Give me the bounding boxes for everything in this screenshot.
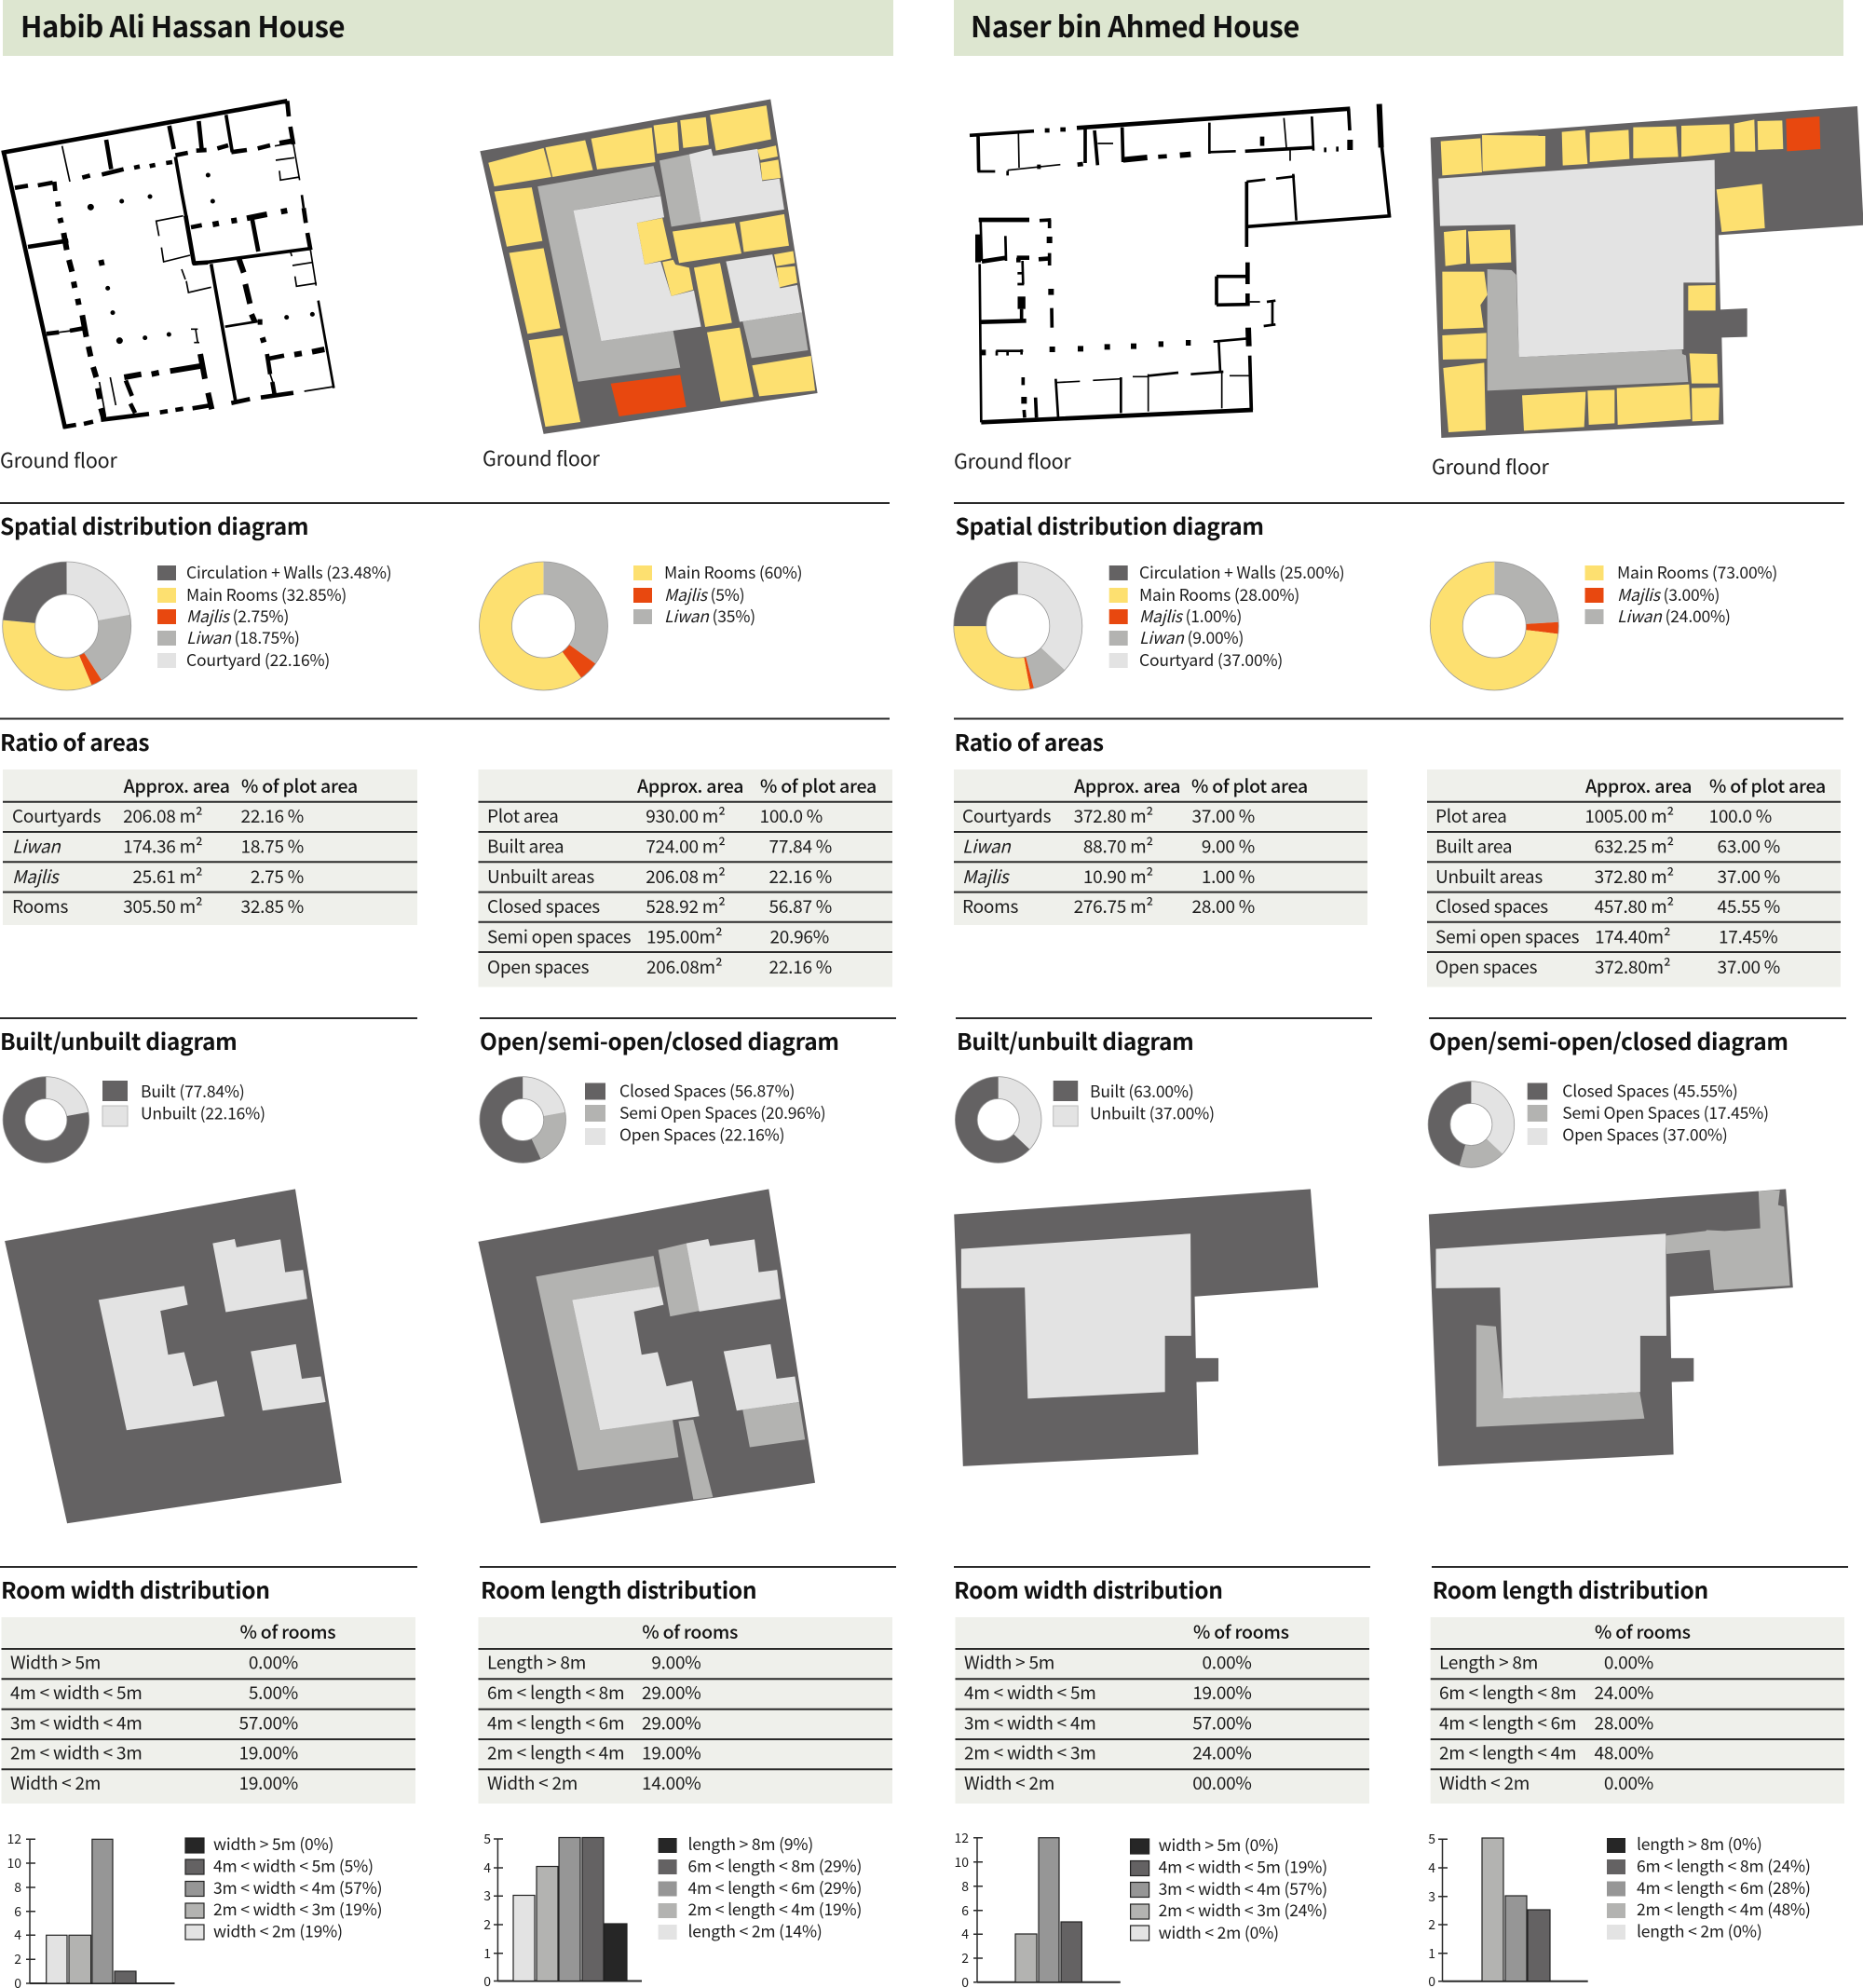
donut: spatial distribution whole plot [3, 562, 131, 690]
heading: built/unbuilt: Built/unbuilt diagram [0, 1025, 237, 1057]
table: room width [2, 1617, 415, 1804]
table: plot areas: 45.55 % [1718, 893, 1780, 919]
bar chart: room length: 1 [1428, 1944, 1435, 1963]
legend: room length: 4m < length < 6m (28%) [1637, 1876, 1811, 1899]
plan: open/semi-open/closed map [478, 1189, 815, 1523]
legend: open/semi-open/closed: Semi Open Spaces (17.45%) [1562, 1101, 1769, 1124]
legend: built/unbuilt: Unbuilt (22.16%) [141, 1101, 265, 1125]
legend: spatial distribution whole plot: Liwan (9.00%) [1139, 626, 1244, 649]
table: courtyard and room areas: Approx. area [124, 771, 230, 798]
table: courtyard and room areas: 10.90 m² [1083, 864, 1153, 889]
table: room length: % of rooms [1595, 1617, 1691, 1644]
table: room length: 9.00% [651, 1650, 700, 1675]
table: room width: 2m < width < 3m [964, 1740, 1096, 1765]
legend: spatial distribution whole plot: Liwan (18.75%) [186, 626, 300, 649]
bar chart: room length: 2 [483, 1915, 491, 1934]
table: plot areas: 22.16 % [769, 864, 832, 889]
donut: spatial distribution built rooms [479, 562, 607, 690]
table: courtyard and room areas: 305.50 m² [123, 893, 203, 919]
legend: room width [1131, 1833, 1327, 1944]
table: plot areas: Unbuilt areas [1435, 864, 1543, 889]
table: room width: 19.00% [239, 1770, 298, 1795]
label: ground floor (walls): Ground floor [0, 445, 118, 474]
legend: open/semi-open/closed: Closed Spaces (45.55%) [1562, 1079, 1738, 1103]
table: room width [956, 1617, 1369, 1804]
heading: ratio of areas: Ratio of areas [954, 726, 1104, 758]
legend: room length: 6m < length < 8m (29%) [687, 1854, 862, 1878]
table: courtyard and room areas: 372.80 m² [1074, 803, 1153, 828]
bar chart: room width: 6 [961, 1901, 969, 1920]
label: ground floor (rooms): Ground floor [1432, 452, 1550, 481]
legend: spatial distribution whole plot: Circulation + Walls (25.00%) [1139, 561, 1345, 584]
legend: room length [659, 1832, 862, 1943]
table: room length: 2m < length < 4m [487, 1740, 624, 1765]
table: room length: % of rooms [642, 1617, 738, 1644]
bar chart: room width: 4 [961, 1925, 969, 1943]
table: room length: Width < 2m [1439, 1770, 1530, 1795]
table: room width: 2m < width < 3m [10, 1740, 143, 1765]
table: room length: 6m < length < 8m [1439, 1680, 1576, 1705]
table: courtyard and room areas: 28.00 % [1192, 893, 1255, 919]
table: room width: Width < 2m [10, 1770, 101, 1795]
table: courtyard and room areas: Majlis [962, 864, 1011, 889]
bar chart: room width: 6 [14, 1902, 21, 1921]
table: room width: 5.00% [249, 1680, 298, 1705]
legend: room length: 6m < length < 8m (24%) [1637, 1854, 1811, 1878]
table: plot areas: 63.00 % [1718, 833, 1780, 858]
table: plot areas: Built area [487, 833, 564, 858]
bar chart: room width: 2 [14, 1950, 21, 1968]
bar chart: room length [1428, 1830, 1588, 1988]
legend: open/semi-open/closed: Open Spaces (22.16%) [619, 1123, 784, 1146]
table: plot areas: 1005.00 m² [1584, 803, 1674, 828]
table: room length: 19.00% [642, 1740, 700, 1765]
legend: room length: 2m < length < 4m (19%) [687, 1898, 862, 1921]
table: room width: 57.00% [239, 1709, 298, 1735]
table: courtyard and room areas: 9.00 % [1202, 833, 1255, 858]
donut: open/semi-open/closed [480, 1077, 566, 1163]
heading: room width: Room width distribution [1, 1573, 270, 1606]
table: room length: 29.00% [642, 1709, 700, 1735]
legend: spatial distribution built rooms: Majlis (5%) [664, 583, 744, 606]
table: room length: Length > 8m [1439, 1650, 1538, 1675]
table: courtyard and room areas: 25.61 m² [132, 864, 203, 889]
plan: coloured room map [480, 100, 818, 434]
table: room length: 29.00% [642, 1680, 700, 1705]
bar chart: room length [483, 1830, 642, 1988]
table: plot areas [479, 769, 892, 987]
legend: room length: length > 8m (9%) [687, 1832, 813, 1856]
legend: open/semi-open/closed [1528, 1079, 1769, 1146]
legend: spatial distribution whole plot: Main Rooms (32.85%) [186, 583, 347, 606]
bar chart: room width [7, 1830, 175, 1988]
table: room width: % of rooms [1193, 1617, 1289, 1644]
bar chart: room length: 5 [1428, 1830, 1435, 1848]
table: plot areas: Semi open spaces [487, 924, 632, 949]
table: courtyard and room areas: 1.00 % [1202, 864, 1255, 889]
legend: open/semi-open/closed: Semi Open Spaces (20.96%) [619, 1101, 826, 1124]
label: ground floor (walls): Ground floor [954, 446, 1072, 475]
table: room width: 3m < width < 4m [10, 1709, 143, 1735]
table: room width: 57.00% [1192, 1709, 1252, 1735]
plan: black wall drawing [2, 101, 333, 429]
table: room width: % of rooms [240, 1617, 335, 1644]
plan: built/unbuilt map [5, 1189, 342, 1523]
table: plot areas: Closed spaces [487, 893, 600, 919]
table: courtyard and room areas: 18.75 % [241, 833, 304, 858]
legend: room length: length > 8m (0%) [1637, 1832, 1762, 1856]
table: courtyard and room areas: 32.85 % [241, 893, 304, 919]
bar chart: room width: 2 [961, 1949, 969, 1968]
legend: spatial distribution built rooms: Main Rooms (73.00%) [1617, 561, 1777, 584]
legend: spatial distribution built rooms: Liwan (35%) [664, 605, 755, 628]
bar chart: room width: 12 [954, 1829, 969, 1847]
table: plot areas: % of plot area [760, 771, 877, 798]
legend: spatial distribution whole plot: Majlis (1.00%) [1139, 605, 1242, 628]
legend: built/unbuilt: Unbuilt (37.00%) [1090, 1101, 1215, 1125]
table: plot areas: Approx. area [1585, 771, 1692, 798]
table: room width: 19.00% [239, 1740, 298, 1765]
bar chart: room width [954, 1829, 1121, 1988]
table: plot areas: Closed spaces [1435, 893, 1548, 919]
legend: spatial distribution whole plot: Courtyard (37.00%) [1139, 648, 1283, 672]
table: room length: 14.00% [642, 1770, 700, 1795]
table: plot areas: 528.92 m² [646, 893, 726, 919]
legend: room length: 2m < length < 4m (48%) [1637, 1898, 1811, 1921]
table: plot areas: 20.96% [769, 924, 829, 949]
title banner: Habib Ali Hassan House [20, 4, 345, 46]
bar chart: room width: 10 [954, 1853, 969, 1872]
table: plot areas: 77.84 % [769, 833, 832, 858]
plan: open/semi-open/closed map [1429, 1189, 1793, 1466]
title banner: Naser bin Ahmed House [971, 4, 1299, 46]
table: courtyard and room areas: Rooms [12, 893, 68, 919]
table: plot areas: 37.00 % [1718, 864, 1780, 889]
title banner [954, 0, 1843, 56]
table: plot areas: 930.00 m² [646, 803, 726, 828]
table: courtyard and room areas: 37.00 % [1192, 803, 1255, 828]
table: courtyard and room areas: Courtyards [962, 803, 1052, 828]
table: plot areas: % of plot area [1709, 771, 1826, 798]
donut: spatial distribution whole plot [954, 562, 1082, 690]
panel: Habib Ali Hassan House [0, 0, 896, 1988]
table: room width: 4m < width < 5m [10, 1680, 143, 1705]
table: courtyard and room areas [3, 769, 417, 925]
legend: room length: 4m < length < 6m (29%) [687, 1876, 862, 1899]
table: courtyard and room areas: Courtyards [12, 803, 102, 828]
table: courtyard and room areas [954, 769, 1367, 925]
plan: coloured room map [1431, 106, 1863, 438]
legend: room width: width < 2m (19%) [213, 1919, 343, 1943]
table: courtyard and room areas: % of plot area [1191, 771, 1308, 798]
bar chart: room length: 4 [483, 1859, 491, 1877]
table: room width: Width > 5m [964, 1650, 1054, 1675]
donut: open/semi-open/closed [1428, 1082, 1515, 1167]
legend: room width: 3m < width < 4m (57%) [213, 1876, 382, 1899]
table: room length: 2m < length < 4m [1439, 1740, 1576, 1765]
table: plot areas: 195.00m² [646, 924, 722, 949]
table: courtyard and room areas: 2.75 % [251, 864, 304, 889]
legend: built/unbuilt: Built (77.84%) [141, 1080, 245, 1103]
bar chart: room length: 2 [1428, 1915, 1435, 1934]
heading: spatial distribution: Spatial distribution diagram [0, 510, 308, 542]
table: room width: Width > 5m [10, 1650, 101, 1675]
legend: built/unbuilt: Built (63.00%) [1090, 1080, 1194, 1103]
legend: room width: 4m < width < 5m (19%) [1159, 1856, 1327, 1878]
table: room width: 19.00% [1192, 1680, 1252, 1705]
bar chart: room width: 8 [14, 1878, 21, 1897]
heading: room length: Room length distribution [481, 1573, 756, 1606]
bar chart: room length: 1 [483, 1944, 491, 1963]
table: room length: 6m < length < 8m [487, 1680, 624, 1705]
table: courtyard and room areas: 206.08 m² [123, 803, 203, 828]
legend: open/semi-open/closed [585, 1079, 826, 1146]
legend: room width: 2m < width < 3m (24%) [1159, 1899, 1327, 1922]
donut: built/unbuilt [3, 1077, 89, 1163]
legend: open/semi-open/closed: Closed Spaces (56.87%) [619, 1079, 795, 1103]
table: room width: 24.00% [1192, 1740, 1252, 1765]
heading: spatial distribution: Spatial distribution diagram [956, 510, 1264, 542]
donut: built/unbuilt [955, 1077, 1041, 1163]
table: room length [479, 1617, 892, 1804]
table: room length: 4m < length < 6m [1439, 1709, 1576, 1735]
legend: room width: width < 2m (0%) [1159, 1921, 1279, 1944]
legend: spatial distribution whole plot [157, 561, 391, 672]
table: plot areas: Unbuilt areas [487, 864, 594, 889]
legend: room length: length < 2m (0%) [1637, 1919, 1762, 1943]
legend: spatial distribution whole plot: Majlis (2.75%) [186, 605, 289, 628]
heading: built/unbuilt: Built/unbuilt diagram [957, 1025, 1193, 1057]
legend: spatial distribution whole plot: Main Rooms (28.00%) [1139, 583, 1299, 606]
table: plot areas: 372.80m² [1595, 954, 1670, 979]
label: ground floor (rooms): Ground floor [483, 443, 601, 472]
table: plot areas: 372.80 m² [1595, 864, 1674, 889]
table: room width: 4m < width < 5m [964, 1680, 1096, 1705]
bar chart: room length: 4 [1428, 1859, 1435, 1877]
table: plot areas: 56.87 % [769, 893, 832, 919]
table: plot areas: Plot area [1435, 803, 1507, 828]
table: plot areas: Semi open spaces [1435, 924, 1580, 949]
table: room width: 00.00% [1192, 1770, 1252, 1795]
table: plot areas: 37.00 % [1718, 954, 1780, 979]
legend: room width: width > 5m (0%) [213, 1832, 333, 1856]
table: courtyard and room areas: % of plot area [241, 771, 358, 798]
legend: room width: 4m < width < 5m (5%) [213, 1854, 374, 1878]
table: plot areas: 174.40m² [1595, 924, 1670, 949]
bar chart: room length: 3 [1428, 1887, 1435, 1906]
bar chart: room length: 3 [483, 1886, 491, 1905]
legend: room width: 3m < width < 4m (57%) [1159, 1877, 1327, 1900]
plan: black wall drawing [970, 104, 1391, 422]
table: plot areas: 206.08 m² [646, 864, 726, 889]
table: plot areas: 457.80 m² [1595, 893, 1674, 919]
donut: spatial distribution built rooms [1430, 562, 1558, 690]
table: room width: 0.00% [1203, 1650, 1252, 1675]
table: room length [1431, 1617, 1844, 1804]
table: courtyard and room areas: 88.70 m² [1083, 833, 1153, 858]
table: room width: Width < 2m [964, 1770, 1054, 1795]
legend: spatial distribution whole plot: Courtyard (22.16%) [186, 648, 330, 672]
table: plot areas: Open spaces [487, 954, 590, 979]
table: courtyard and room areas: Liwan [962, 833, 1012, 858]
table: room length: 28.00% [1595, 1709, 1653, 1735]
legend: spatial distribution whole plot: Circulation + Walls (23.48%) [186, 561, 391, 584]
table: plot areas: Approx. area [637, 771, 743, 798]
table: courtyard and room areas: Approx. area [1074, 771, 1180, 798]
table: room length: 4m < length < 6m [487, 1709, 624, 1735]
legend: built/unbuilt [1054, 1080, 1215, 1126]
table: room width: 0.00% [249, 1650, 298, 1675]
table: courtyard and room areas: Rooms [962, 893, 1018, 919]
legend: room width: width > 5m (0%) [1159, 1833, 1279, 1857]
title banner [3, 0, 893, 56]
legend: spatial distribution built rooms: Majlis (3.00%) [1617, 583, 1720, 606]
bar chart: room width: 10 [7, 1854, 21, 1872]
table: courtyard and room areas: 174.36 m² [123, 833, 203, 858]
table: room length: 0.00% [1604, 1650, 1653, 1675]
table: courtyard and room areas: Liwan [12, 833, 61, 858]
table: plot areas: Built area [1435, 833, 1512, 858]
table: plot areas: 100.0 % [1709, 803, 1772, 828]
table: plot areas: 100.0 % [760, 803, 823, 828]
heading: room width: Room width distribution [954, 1573, 1223, 1606]
legend: spatial distribution built rooms [1585, 561, 1777, 628]
table: courtyard and room areas: Majlis [12, 864, 61, 889]
panel: Naser bin Ahmed House [954, 0, 1863, 1988]
table: room width: 3m < width < 4m [964, 1709, 1096, 1735]
table: room length: 0.00% [1604, 1770, 1653, 1795]
table: plot areas: 17.45% [1719, 924, 1777, 949]
legend: room length [1607, 1832, 1811, 1943]
bar chart: room length: 5 [483, 1830, 491, 1848]
legend: room width [185, 1832, 382, 1943]
table: plot areas: 632.25 m² [1595, 833, 1674, 858]
table: room length: Width < 2m [487, 1770, 578, 1795]
bar chart: room width: 4 [14, 1926, 21, 1944]
table: plot areas: 206.08m² [646, 954, 722, 979]
table: plot areas: Plot area [487, 803, 559, 828]
legend: spatial distribution built rooms [633, 561, 802, 628]
table: room length: Length > 8m [487, 1650, 586, 1675]
table: courtyard and room areas: 22.16 % [241, 803, 304, 828]
legend: room width: 2m < width < 3m (19%) [213, 1898, 382, 1921]
legend: spatial distribution built rooms: Liwan (24.00%) [1617, 605, 1731, 628]
heading: open/semi-open/closed: Open/semi-open/closed diagram [480, 1025, 839, 1057]
table: courtyard and room areas: 276.75 m² [1074, 893, 1153, 919]
table: room length: 48.00% [1595, 1740, 1653, 1765]
table: plot areas [1427, 769, 1841, 987]
heading: room length: Room length distribution [1433, 1573, 1708, 1606]
table: plot areas: Open spaces [1435, 954, 1538, 979]
table: room length: 24.00% [1595, 1680, 1653, 1705]
legend: open/semi-open/closed: Open Spaces (37.00%) [1562, 1123, 1728, 1146]
legend: room length: length < 2m (14%) [687, 1919, 823, 1943]
bar chart: room width: 12 [7, 1830, 21, 1848]
legend: spatial distribution built rooms: Main Rooms (60%) [664, 561, 802, 584]
heading: ratio of areas: Ratio of areas [0, 726, 149, 758]
legend: spatial distribution whole plot [1109, 561, 1345, 672]
heading: open/semi-open/closed: Open/semi-open/closed diagram [1429, 1025, 1788, 1057]
table: plot areas: 22.16 % [769, 954, 832, 979]
legend: built/unbuilt [102, 1080, 265, 1126]
table: plot areas: 724.00 m² [646, 833, 726, 858]
bar chart: room width: 8 [961, 1877, 969, 1896]
plan: built/unbuilt map [954, 1189, 1318, 1466]
